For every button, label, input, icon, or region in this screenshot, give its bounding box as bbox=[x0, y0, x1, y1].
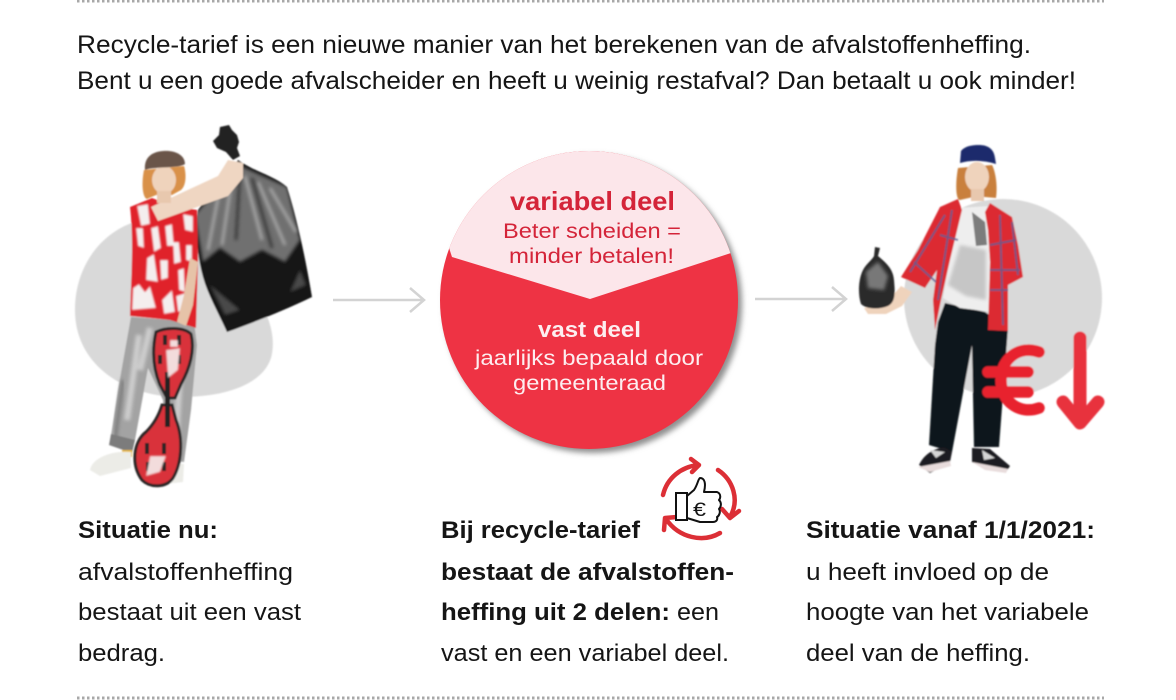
red patterned shirt bbox=[130, 198, 198, 328]
label: variabel deel bbox=[503, 186, 681, 268]
illustration: person now with large garbage bag bbox=[75, 125, 312, 486]
arrow: recycle tariff to future bbox=[755, 287, 846, 311]
column: bij recycle-tarief bbox=[441, 517, 734, 667]
intro text: Bent u een goede afvalscheider en heeft u weinig restafval? Dan betaalt u ook minder! bbox=[77, 67, 1076, 95]
column: bij recycle-tarief: heffing uit 2 delen: bbox=[441, 599, 670, 626]
red flannel shirt bbox=[901, 199, 1023, 331]
legs in grey jeans bbox=[109, 317, 197, 462]
column: situatie nu: Situatie nu: bbox=[78, 517, 218, 544]
lower arm bbox=[177, 258, 198, 326]
grey blob behind person bbox=[75, 217, 273, 397]
icon: thumbs up with euro and recycle arrows: € bbox=[693, 500, 707, 521]
label: vast deel: gemeenteraad bbox=[513, 371, 666, 395]
intro text bbox=[77, 31, 1076, 95]
raised arm bbox=[151, 160, 243, 221]
euro down icon bbox=[988, 338, 1098, 423]
head with hair and cap bbox=[956, 145, 997, 201]
sneakers bbox=[90, 452, 184, 484]
large garbage bag bbox=[195, 125, 312, 332]
column: situatie vanaf 1/1/2021: Situatie vanaf 1/1/2021: bbox=[806, 517, 1095, 544]
column: situatie nu: afvalstoffenheffing bbox=[78, 559, 293, 586]
column: situatie nu: bestaat uit een vast bbox=[78, 599, 301, 626]
tariff circle bbox=[440, 150, 742, 453]
column: bij recycle-tarief: een bbox=[677, 599, 719, 626]
label: vast deel: vast deel bbox=[538, 317, 641, 342]
intro text: Recycle-tarief is een nieuwe manier van het berekenen van de afvalstoffenheffing. bbox=[77, 31, 1031, 59]
label: variabel deel: minder betalen! bbox=[509, 244, 674, 268]
shoes bbox=[918, 448, 1010, 473]
small garbage bag bbox=[859, 247, 895, 308]
column: situatie vanaf 1/1/2021: deel van de heffing. bbox=[806, 640, 1030, 667]
arm and hand bbox=[864, 286, 912, 314]
column: situatie vanaf 1/1/2021: hoogte van het variabele bbox=[806, 599, 1089, 626]
column: bij recycle-tarief: vast en een variabel deel. bbox=[441, 640, 729, 667]
column: bij recycle-tarief: Bij recycle-tarief bbox=[441, 517, 641, 544]
white t-shirt bbox=[943, 206, 992, 312]
black trousers bbox=[929, 303, 1008, 452]
label: variabel deel: Beter scheiden = bbox=[503, 219, 681, 243]
segment: variabel deel bbox=[440, 150, 740, 299]
column: situatie nu: bedrag. bbox=[78, 640, 165, 667]
waveboard bbox=[135, 328, 192, 486]
label: vast deel: jaarlijks bepaald door bbox=[474, 346, 703, 370]
label: vast deel bbox=[474, 317, 703, 395]
grey circle behind person bbox=[904, 199, 1102, 397]
illustration: person from 2021 with small garbage bag bbox=[859, 145, 1102, 473]
column: situatie nu bbox=[78, 517, 301, 667]
label: variabel deel: variabel deel bbox=[510, 186, 675, 216]
column: situatie vanaf 1/1/2021: u heeft invloed op de bbox=[806, 559, 1049, 586]
arrow: now to recycle tariff bbox=[333, 288, 424, 312]
column: bij recycle-tarief: bestaat de afvalstoffen- bbox=[441, 559, 734, 586]
column: situatie vanaf 1/1/2021 bbox=[806, 517, 1095, 667]
head with hair and cap bbox=[143, 151, 186, 203]
icon: thumbs up with euro and recycle arrows bbox=[663, 459, 739, 538]
